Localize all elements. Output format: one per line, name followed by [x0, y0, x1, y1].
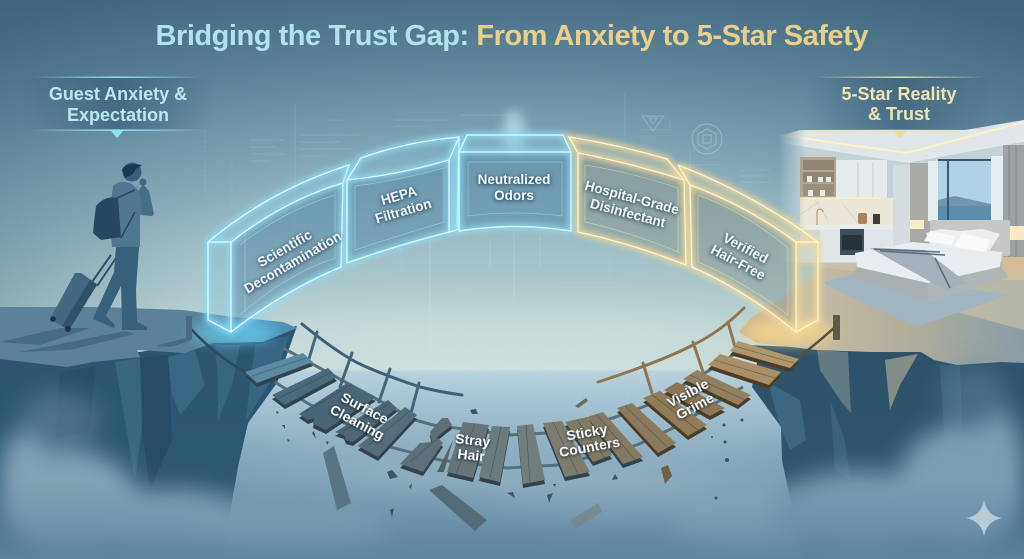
right cliff — [739, 262, 1024, 559]
room floor edge — [775, 262, 1024, 330]
bedside lamps — [910, 220, 1024, 240]
backpack — [93, 197, 121, 240]
rug — [822, 272, 1008, 327]
clouds at the bottom — [0, 365, 1024, 559]
panel: Neutralized Odors — [459, 135, 571, 231]
nightstand — [1002, 257, 1024, 280]
plank label: Visible Grime: Grime — [673, 389, 717, 423]
plank grain — [252, 346, 794, 482]
suitcase — [50, 255, 116, 332]
bed — [852, 220, 1010, 303]
traveller figure — [50, 162, 154, 332]
panel text: Disinfectant — [589, 196, 668, 231]
label: 5-Star Reality and Trust — [805, 76, 995, 129]
plank sides — [245, 345, 799, 488]
cliff rock facets — [55, 335, 290, 490]
label: Guest Anxiety and Expectation — [20, 76, 215, 138]
panel text: Filtration — [374, 196, 433, 226]
panel text: Neutralized — [478, 172, 550, 187]
bridge stringers — [275, 348, 743, 468]
backpack strap — [117, 190, 135, 238]
panel text: Decontamination — [242, 229, 344, 296]
panel text — [478, 172, 550, 203]
panel text: HEPA — [379, 183, 419, 208]
plank tops — [245, 341, 799, 484]
panel text — [579, 178, 681, 233]
legs — [93, 247, 147, 330]
ground shadows — [0, 328, 190, 352]
rope rails and posts — [190, 308, 834, 413]
plank label: Stray Hair: Stray — [454, 430, 491, 450]
panel text: Odors — [494, 188, 534, 203]
panel: Scientific Decontamination — [208, 165, 349, 332]
plank label: Sticky Counters: Counters — [558, 434, 621, 460]
panel text: Verified — [720, 230, 771, 266]
plank label: Sticky Counters: Sticky — [565, 421, 609, 444]
glass bridge of solutions — [208, 110, 818, 332]
warm panel glow — [744, 318, 836, 346]
plank label: Visible Grime — [664, 375, 719, 424]
ceiling chevron — [894, 131, 906, 138]
panel text — [369, 181, 433, 226]
bridge — [186, 308, 840, 531]
left post — [186, 316, 192, 340]
room wall and ceiling — [775, 120, 1024, 262]
panel text: Scientific — [255, 227, 315, 270]
label: 5-Star Reality and Trust: & Trust — [868, 104, 930, 124]
icon: HUD shield circle — [692, 124, 722, 154]
label: Guest Anxiety and Expectation: Guest Anxiety & — [49, 84, 187, 104]
label: Guest Anxiety and Expectation: Expectation — [67, 105, 169, 125]
top light beam — [503, 110, 525, 154]
icon: HUD diamond — [642, 116, 664, 131]
arm — [139, 184, 154, 216]
torso and hood — [109, 182, 154, 247]
left cliff — [0, 307, 297, 559]
title: Bridging the Trust Gap: From Anxiety to 5-Star Safety — [156, 20, 868, 52]
head — [122, 162, 146, 186]
panel text — [708, 228, 776, 283]
plank label: Surface Cleaning: Surface — [338, 389, 391, 427]
background HUD data lines — [205, 92, 770, 350]
panel text: Hair-Free — [708, 242, 768, 283]
label: 5-Star Reality and Trust: 5-Star Reality — [841, 84, 957, 104]
plank label: Sticky Counters — [555, 419, 621, 460]
panel: Verified Hair-Free — [678, 165, 818, 332]
cold panel glow — [190, 321, 274, 345]
plank label: Surface Cleaning: Cleaning — [327, 401, 387, 443]
falling broken planks — [323, 446, 602, 531]
icon: sparkle — [966, 500, 1002, 536]
debris shards — [276, 392, 744, 517]
plank label: Visible Grime: Visible — [664, 375, 711, 410]
panel: HEPA Filtration — [347, 137, 459, 263]
cloud bottom shading — [0, 480, 1024, 559]
cliff rock facets — [768, 350, 962, 480]
panel: Hospital-Grade Disinfectant — [569, 137, 686, 265]
hotel room scene — [775, 120, 1024, 330]
plank label: Stray Hair: Hair — [457, 446, 486, 464]
kitchen — [800, 157, 910, 263]
plank label: Surface Cleaning — [327, 387, 395, 443]
panel text: Hospital-Grade — [583, 178, 681, 218]
window and curtains — [910, 145, 1024, 257]
right post — [833, 315, 840, 340]
plank label: Stray Hair — [453, 430, 491, 465]
